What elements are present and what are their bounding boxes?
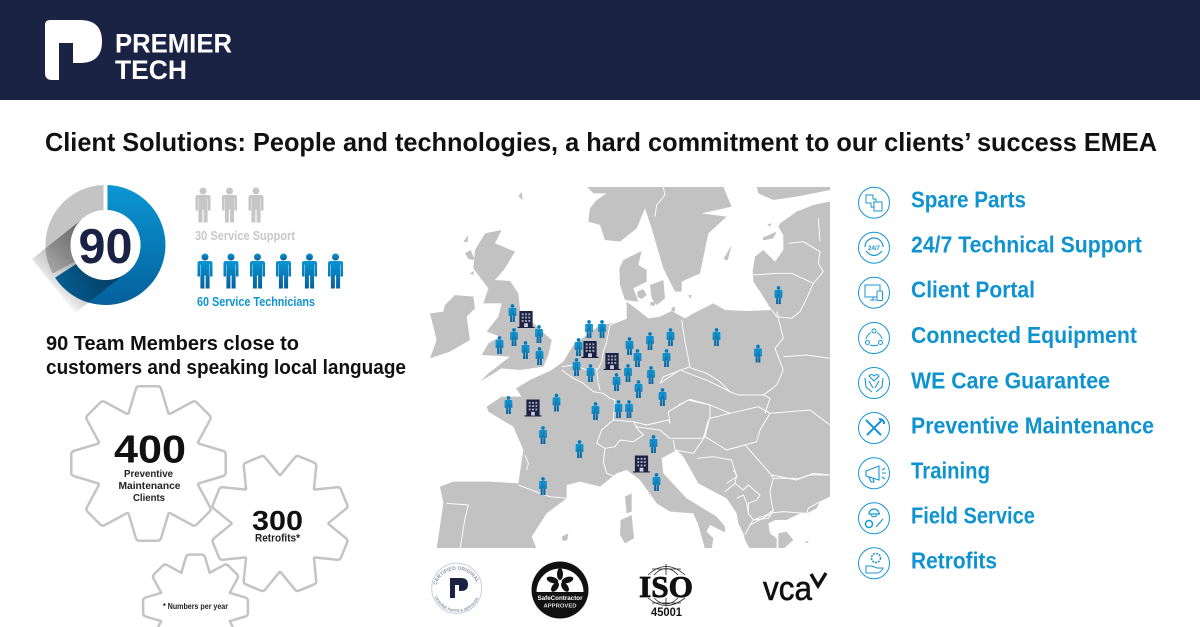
gear: 400 preventive maintenance clients: Clients xyxy=(133,492,165,504)
service: spare parts: Spare Parts xyxy=(911,186,1026,212)
team members statement: customers and speaking local language xyxy=(46,357,406,379)
gear: 400 preventive maintenance clients: Maintenance xyxy=(118,480,181,492)
service: technical support: 24/7 xyxy=(868,246,880,252)
service support pictogram: 30 Service Support xyxy=(195,229,296,243)
badge: certified original: GENUINE PARTS & SERVICES xyxy=(435,596,478,612)
service technicians pictogram xyxy=(197,254,343,309)
service: preventive maintenance xyxy=(858,412,1154,444)
service: training: Training xyxy=(911,458,990,484)
badge: SafeContractor approved: APPROVED xyxy=(544,604,577,610)
badge: VCA: vca xyxy=(763,570,812,608)
badge: ISO 45001 xyxy=(639,564,693,619)
service: preventive maintenance: Preventive Maintenance xyxy=(911,412,1154,438)
team members statement: 90 Team Members close to xyxy=(46,333,299,355)
service technicians pictogram: 60 Service Technicians xyxy=(197,295,315,309)
service: retrofits xyxy=(858,547,997,579)
gear: 400 preventive maintenance clients xyxy=(75,390,222,537)
gear: 300 retrofits: Retrofits* xyxy=(255,532,301,544)
gear: numbers per year: * Numbers per year xyxy=(163,601,229,611)
gear: 300 retrofits: 300 xyxy=(252,505,303,536)
service: spare parts xyxy=(858,186,1026,218)
badge: certified original xyxy=(431,562,482,614)
service: field service xyxy=(858,502,1035,534)
service support pictogram xyxy=(195,188,296,243)
service: retrofits: Retrofits xyxy=(911,547,997,573)
service: connected equipment xyxy=(858,322,1137,354)
team members statement xyxy=(46,333,406,379)
service: WE care guarantee: WE Care Guarantee xyxy=(911,368,1110,394)
service: field service: Field Service xyxy=(911,502,1035,528)
service: client portal: Client Portal xyxy=(911,277,1035,303)
service: training xyxy=(858,458,990,489)
badge: ISO 45001: 45001 xyxy=(651,605,682,619)
map markers: offices xyxy=(518,311,650,472)
service: technical support: 24/7 Technical Support xyxy=(911,232,1142,258)
country borders xyxy=(447,187,830,549)
service: connected equipment: Connected Equipment xyxy=(911,322,1137,348)
gear: 300 retrofits xyxy=(194,438,366,609)
gear: 400 preventive maintenance clients: Preventive xyxy=(124,468,173,480)
map markers: technicians xyxy=(496,286,782,495)
landmasses xyxy=(430,187,830,549)
badge: SafeContractor approved xyxy=(532,562,588,618)
badge: ISO 45001: ISO xyxy=(639,569,693,604)
badge: SafeContractor approved: SafeContractor xyxy=(538,595,583,602)
Aegean sea xyxy=(768,497,830,549)
badge: certified original: CERTIFIED ORIGINAL xyxy=(433,566,479,584)
donut chart: 90 team members: 90 xyxy=(78,220,132,274)
gear: 400 preventive maintenance clients: 400 xyxy=(114,429,186,472)
logo wordmark xyxy=(115,28,232,85)
service: technical support xyxy=(858,232,1142,263)
service: client portal xyxy=(858,277,1035,308)
donut chart: 90 team members xyxy=(32,185,165,313)
services list xyxy=(858,186,1154,579)
header band xyxy=(0,0,1200,100)
logo wordmark: PREMIER xyxy=(115,28,232,58)
gear: numbers per year xyxy=(147,558,244,627)
service: WE care guarantee xyxy=(858,368,1110,398)
logo mark xyxy=(45,20,102,80)
logo wordmark: TECH xyxy=(115,55,187,85)
title: Client Solutions: People and technologies, a hard commitment to our clients’ success EMEA xyxy=(45,127,1157,157)
map of Europe xyxy=(430,187,830,549)
